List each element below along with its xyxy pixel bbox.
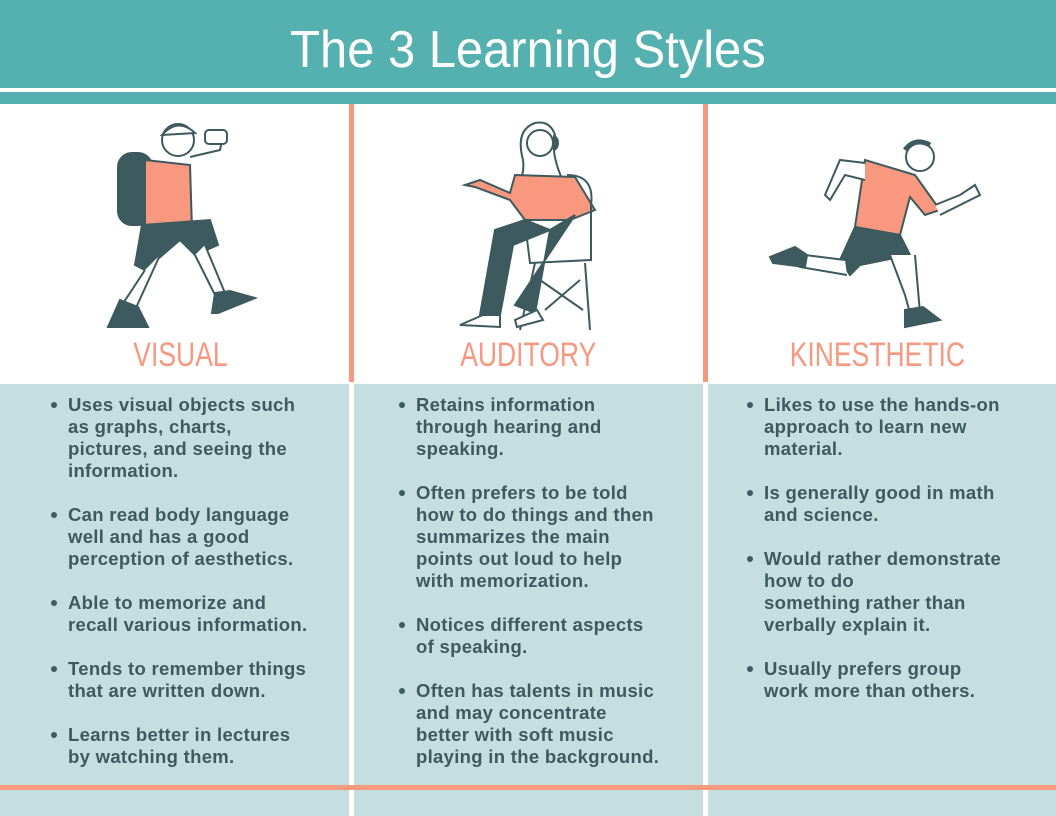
panel: kinesthetic: Is generally good in math [764,482,995,503]
panel: kinesthetic: and science. [764,504,879,525]
panel: kinesthetic: Usually prefers group [764,658,962,679]
panel: visual: as graphs, charts, [68,416,232,437]
panel: auditory: Often prefers to be told [416,482,628,503]
heading: auditory: AUDITORY [460,336,596,374]
title [0,0,1056,88]
panel: kinesthetic: Likes to use the hands-on [764,394,1000,415]
panel: auditory: and may concentrate [416,702,607,723]
panel: visual: perception of aesthetics. [68,548,293,569]
panel: kinesthetic: Would rather demonstrate [764,548,1001,569]
panel: visual: Able to memorize and [68,592,266,613]
icon: auditory person on chair [460,122,596,330]
panel: visual: by watching them. [68,746,234,767]
panel: auditory: playing in the background. [416,746,659,767]
panel: kinesthetic: work more than others. [764,680,975,701]
panel: auditory: how to do things and then [416,504,654,525]
panel: auditory: with memorization. [416,570,589,591]
icon: kinesthetic running person [768,139,982,328]
panel: visual: information. [68,460,178,481]
teal bar [0,92,1056,104]
panel: visual: Tends to remember things [68,658,306,679]
panel: auditory: through hearing and [416,416,602,437]
panel: kinesthetic: material. [764,438,843,459]
panel: visual: that are written down. [68,680,266,701]
panel: auditory [354,384,703,816]
panel: auditory: points out loud to help [416,548,622,569]
panel: kinesthetic: approach to learn new [764,416,967,437]
divider 1 [349,104,354,382]
panel: visual: Uses visual objects such [68,394,295,415]
panel: visual: well and has a good [68,526,249,547]
title: The 3 Learning Styles [290,21,766,79]
panel: kinesthetic: verbally explain it. [764,614,930,635]
panel: kinesthetic [708,384,1056,816]
panel: kinesthetic: how to do [764,570,854,591]
panel: kinesthetic: something rather than [764,592,966,613]
panel: auditory: Retains information [416,394,595,415]
panel: visual [0,384,349,816]
bottom salmon line [0,785,1056,790]
panel: auditory: better with soft music [416,724,614,745]
panel: visual: Learns better in lectures [68,724,290,745]
panel: visual: pictures, and seeing the [68,438,287,459]
panel: auditory: speaking. [416,438,504,459]
panel: auditory: summarizes the main [416,526,610,547]
panel: auditory: Notices different aspects [416,614,644,635]
panel: auditory: of speaking. [416,636,528,657]
panel: visual: recall various information. [68,614,307,635]
heading: visual: VISUAL [133,336,227,374]
panel: visual: Can read body language [68,504,289,525]
panel: auditory: Often has talents in music [416,680,654,701]
icon: visual person with binoculars [106,123,258,328]
heading: kinesthetic: KINESTHETIC [789,336,965,374]
divider 2 [703,104,708,382]
